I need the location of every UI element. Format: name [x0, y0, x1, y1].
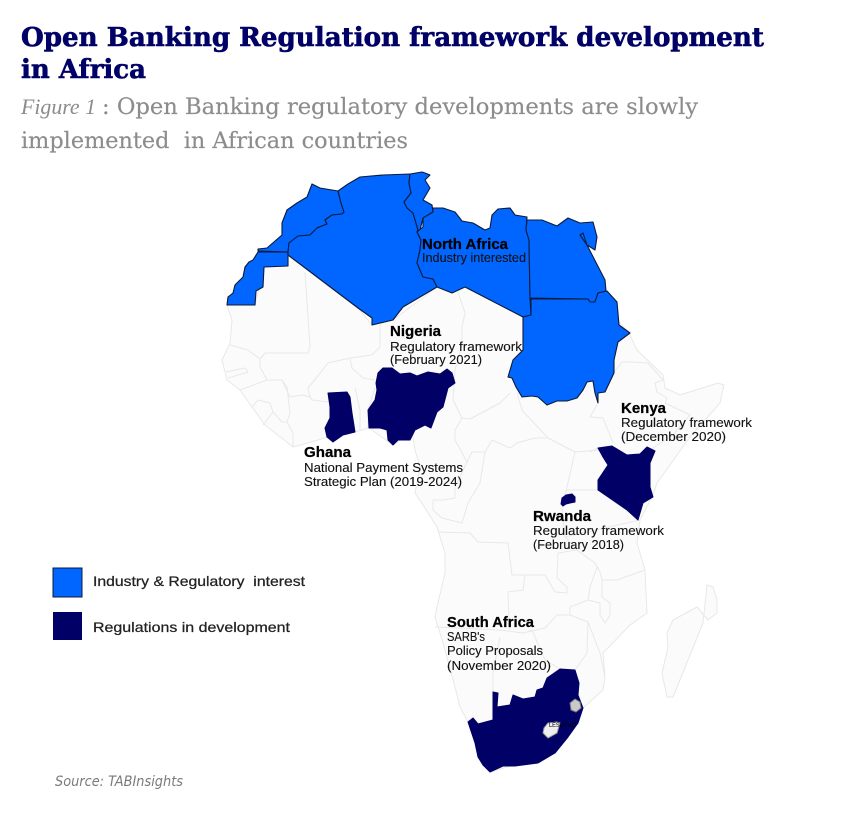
country: Lesotho: LESOTHO [549, 723, 576, 729]
country: Tunisia [404, 172, 433, 230]
country: Rwanda [561, 494, 575, 506]
country: Egypt [526, 218, 606, 302]
region: North Africa (blue countries) [227, 172, 630, 405]
label: Nigeria: Regulatory framework [390, 340, 523, 354]
label: Rwanda [533, 509, 665, 552]
label: North Africa: North Africa [422, 237, 509, 253]
label: Ghana: Strategic Plan (2019-2024) [304, 475, 462, 489]
label: Kenya: Kenya [621, 401, 667, 417]
label: North Africa: Industry interested [422, 251, 526, 265]
country: Algeria [288, 174, 437, 325]
country: Western Sahara [227, 252, 288, 305]
title [21, 23, 764, 85]
label: Kenya [621, 401, 753, 444]
country: South Africa [468, 669, 583, 772]
country: Morocco [258, 184, 344, 252]
label: Rwanda: Rwanda [533, 509, 592, 525]
source note: Source: TABInsights [55, 774, 183, 790]
label: Ghana: National Payment Systems [304, 461, 463, 475]
map of Africa [222, 172, 724, 772]
label: North Africa [422, 237, 526, 265]
country: Ghana [325, 392, 355, 442]
title: in Africa [21, 55, 146, 85]
label: Rwanda: (February 2018) [533, 538, 624, 552]
country: Lesotho [543, 722, 576, 738]
label: South Africa: (November 2020) [447, 659, 551, 673]
label: Nigeria: (February 2021) [390, 353, 482, 367]
country: Eswatini [570, 699, 581, 712]
subtitle: : Open Banking regulatory developments are slowly [102, 95, 699, 120]
label: Kenya: Regulatory framework [621, 416, 753, 430]
label: South Africa: South Africa [447, 615, 535, 631]
country: Sudan [508, 291, 630, 405]
label: South Africa: Policy Proposals [447, 644, 543, 658]
label: Rwanda: Regulatory framework [533, 524, 665, 538]
label: South Africa [447, 615, 551, 673]
country: Libya [417, 208, 531, 317]
legend item: industry and regulatory interest: Industry & Regulatory interest [93, 573, 305, 589]
legend [53, 568, 305, 640]
subtitle: Figure 1 [20, 94, 96, 119]
base map: other African countries [222, 255, 724, 772]
subtitle [20, 94, 699, 154]
label: Ghana: Ghana [304, 445, 352, 461]
legend item: regulations in development: Regulations in development [93, 619, 290, 635]
legend item: regulations in development [53, 612, 290, 640]
Madagascar [662, 585, 717, 697]
country: Kenya [598, 446, 655, 520]
label: Ghana [304, 445, 463, 489]
title: Open Banking Regulation framework development [21, 23, 764, 53]
label: Nigeria [390, 324, 523, 367]
label: Kenya: (December 2020) [621, 430, 726, 444]
subtitle: implemented in African countries [21, 129, 408, 154]
country: Nigeria [368, 368, 455, 445]
label: Nigeria: Nigeria [390, 324, 442, 340]
label: South Africa: SARB's [447, 630, 485, 644]
legend item: industry and regulatory interest [53, 568, 305, 597]
